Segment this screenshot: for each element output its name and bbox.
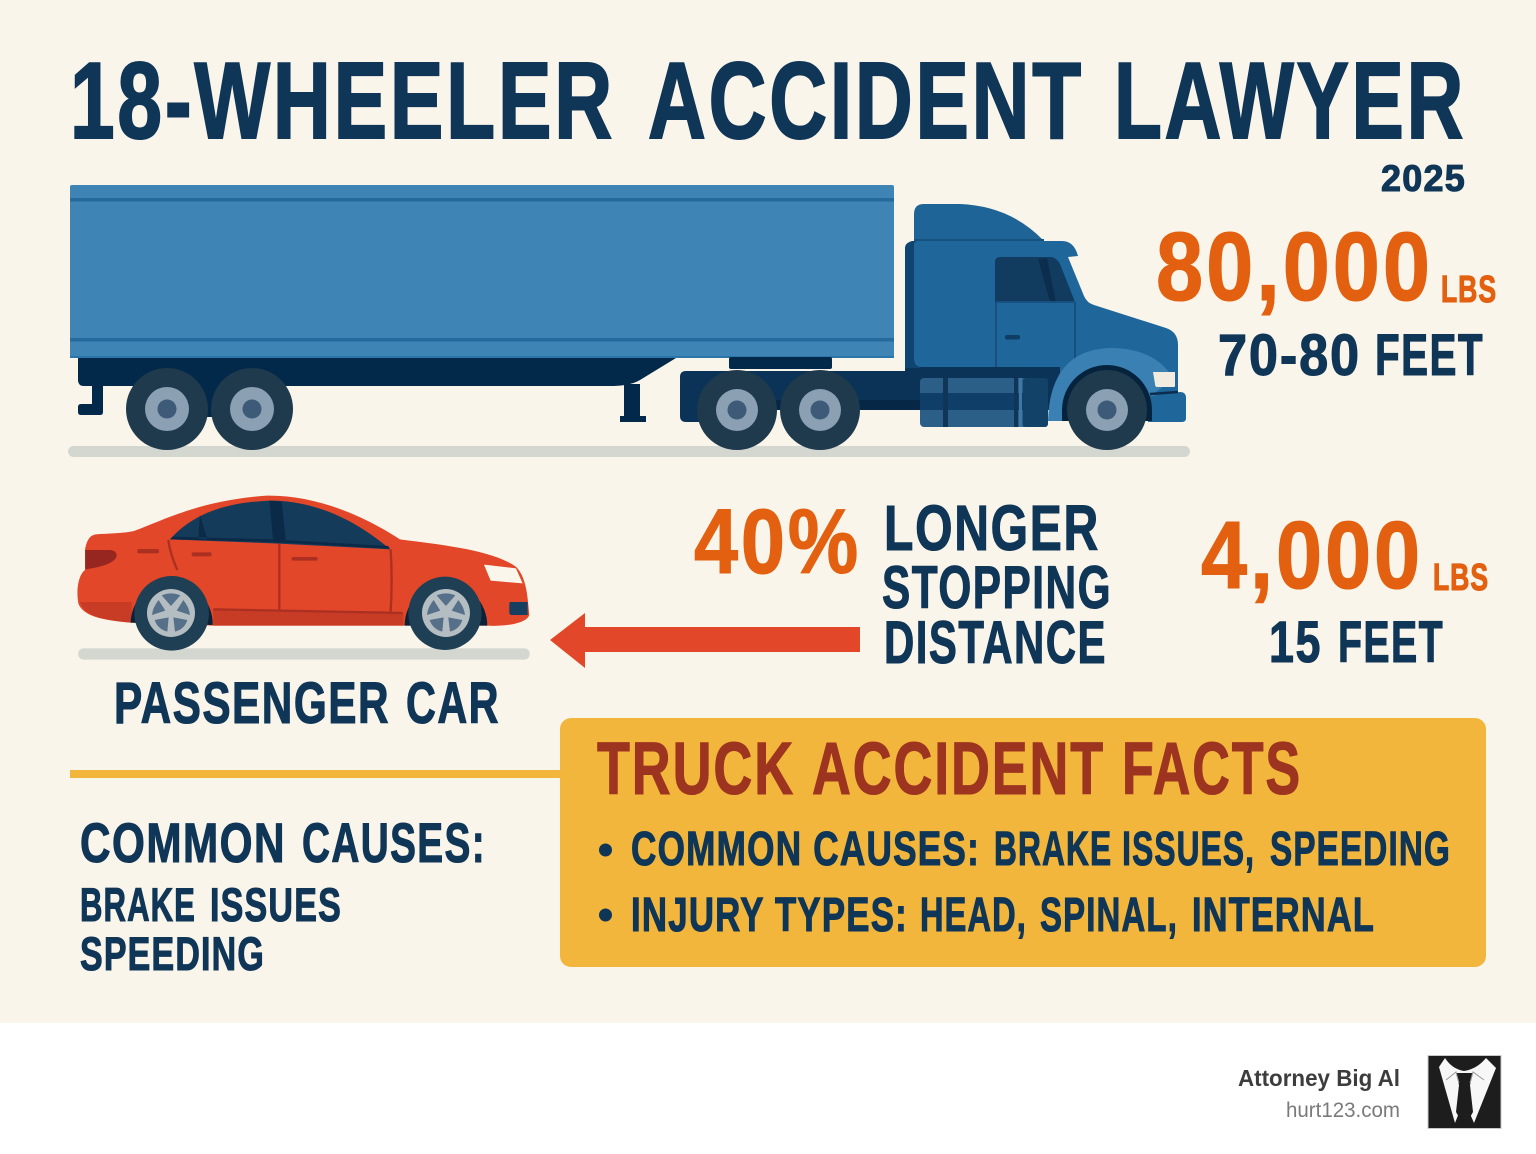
bullet 2 text: INTERNAL — [1192, 889, 1375, 942]
door seams and handle — [996, 302, 1075, 367]
cause 1 — [80, 878, 342, 931]
front vent — [509, 602, 528, 615]
panel: truck accident facts — [560, 718, 1486, 967]
front wheel — [1067, 370, 1147, 450]
axle stub — [190, 386, 230, 417]
weight unit: LBS — [1441, 269, 1497, 311]
bullet 1 text: COMMON CAUSES: — [631, 823, 980, 876]
headlight — [484, 565, 523, 583]
bullet 2 text: HEAD, — [920, 889, 1027, 942]
car length — [1269, 610, 1444, 675]
tractor wheel 2 — [780, 370, 860, 450]
bullet 2 dot — [599, 908, 612, 922]
tractor wheel 1 — [697, 370, 777, 450]
icon: attorney suit logo — [1428, 1056, 1501, 1128]
panel background — [560, 718, 1486, 967]
tractor chassis — [680, 366, 1062, 422]
stopping: STOPPING — [882, 554, 1112, 621]
rear wheel — [134, 576, 209, 651]
title — [70, 40, 1466, 162]
car sill shade — [80, 602, 403, 626]
trailer wheel 1 — [126, 368, 208, 450]
chassis lower shade — [700, 400, 922, 410]
causes heading — [80, 811, 486, 874]
headlight — [1153, 372, 1175, 387]
car label: CAR — [406, 671, 500, 736]
illustration: passenger car — [77, 496, 530, 660]
trailer box — [70, 185, 894, 358]
wheel arch — [1062, 365, 1152, 421]
front fender — [1048, 348, 1172, 421]
bumper — [1148, 392, 1186, 422]
tail light — [85, 550, 117, 569]
cause 1: ISSUES — [210, 878, 342, 931]
weight number: 80,000 — [1156, 212, 1433, 321]
connector line — [70, 770, 562, 778]
car ground shadow — [78, 648, 530, 660]
bullet 2 text — [631, 889, 1375, 942]
year label: 2025 — [1381, 158, 1466, 199]
panel heading: FACTS — [1122, 727, 1302, 810]
fifth wheel coupling — [729, 357, 832, 369]
bullet 2 text: SPINAL, — [1040, 889, 1178, 942]
truck weight stat — [1156, 212, 1497, 321]
stopping distance stat — [694, 491, 1112, 676]
causes heading: COMMON — [80, 811, 286, 874]
front wheel — [408, 577, 482, 650]
cab and hood body — [914, 241, 1178, 400]
car weight unit: LBS — [1433, 557, 1489, 599]
distance: DISTANCE — [884, 609, 1107, 676]
causes heading: CAUSES: — [302, 811, 486, 874]
footer url: hurt123.com — [1286, 1099, 1400, 1122]
door handles — [137, 549, 318, 561]
truck ground shadow — [68, 446, 1190, 457]
common causes block — [80, 811, 486, 980]
car weight number: 4,000 — [1201, 502, 1423, 609]
car length: FEET — [1338, 610, 1444, 675]
title: ACCIDENT — [648, 40, 1084, 162]
panel heading: TRUCK — [597, 727, 795, 810]
roof line — [914, 239, 1044, 241]
bullet 1 text: SPEEDING — [1270, 823, 1451, 876]
wheel arches — [131, 582, 487, 626]
car weight stat — [1201, 502, 1489, 609]
truck length: FEET — [1375, 323, 1484, 388]
cab rear shadow — [905, 241, 920, 368]
truck length — [1218, 323, 1484, 388]
fuel tank — [920, 378, 1048, 427]
cab window — [995, 257, 1075, 302]
trailer underframe — [78, 358, 676, 415]
wheels — [126, 368, 1147, 450]
bullet 2 text: INJURY TYPES: — [631, 889, 908, 942]
trailer wheel 2 — [211, 368, 293, 450]
cause 1: BRAKE — [80, 878, 196, 931]
landing gear — [620, 384, 646, 422]
bullet 1 text — [631, 823, 1451, 876]
car body — [77, 496, 529, 626]
percent number: 40% — [694, 491, 861, 593]
car label: PASSENGER — [114, 671, 390, 736]
bullet 1 dot — [599, 844, 612, 856]
cab rear fairing — [914, 204, 1043, 240]
arrow pointing to car — [550, 613, 860, 668]
door seams — [168, 540, 403, 613]
cause 2: SPEEDING — [80, 927, 265, 980]
panel heading: ACCIDENT — [812, 727, 1105, 810]
illustration: semi truck — [68, 185, 1190, 457]
longer: LONGER — [884, 492, 1100, 564]
bumper line — [1150, 392, 1178, 394]
window pillars and sill — [170, 501, 390, 549]
footer band — [0, 1023, 1536, 1154]
car length: 15 — [1269, 610, 1322, 675]
footer brand name: Attorney Big Al — [1238, 1065, 1400, 1091]
window glass — [170, 501, 390, 549]
panel heading — [597, 727, 1302, 810]
truck length: 70-80 — [1218, 323, 1361, 388]
bullet 1 text: BRAKE ISSUES, — [994, 823, 1255, 876]
title: 18-WHEELER — [70, 40, 615, 162]
